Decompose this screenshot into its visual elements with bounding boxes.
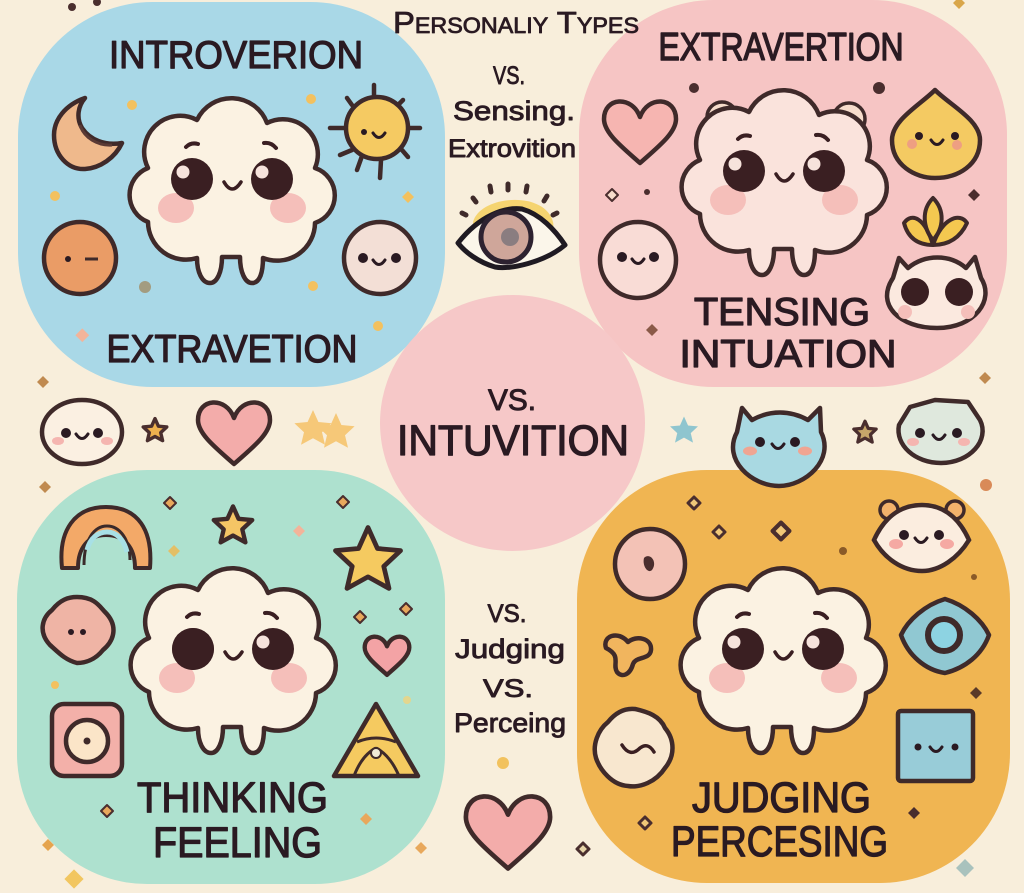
icon: cookie <box>595 709 672 786</box>
panel: extraversion <box>579 0 1007 387</box>
icon: large star <box>335 528 401 588</box>
cloud character <box>130 98 335 283</box>
icon: small star <box>143 419 167 441</box>
icon: left face <box>42 400 122 464</box>
icon: cat <box>887 257 985 328</box>
row icons between panels <box>42 400 983 486</box>
label: thinking feeling <box>137 774 328 867</box>
heading: introversion: INTROVERION <box>109 34 363 77</box>
icon: square face <box>898 711 973 781</box>
icon: right face <box>898 400 983 463</box>
sparkles <box>42 496 427 854</box>
icon: blue cat <box>733 408 825 486</box>
icon: orange ball <box>44 222 116 294</box>
icon: drop <box>892 90 980 178</box>
sparkles <box>639 497 982 829</box>
label: thinking feeling: THINKING <box>137 774 328 822</box>
top title text: Sensing. <box>453 96 575 126</box>
icon: central eye <box>458 184 565 268</box>
label: vs intuvition <box>397 384 629 465</box>
label: tensing intuation: INTUATION <box>680 333 896 376</box>
icon: blue sparkle <box>670 416 698 443</box>
heading: extravertion: EXTRAVERTION <box>658 26 904 69</box>
label: vs intuvition: INTUVITION <box>397 417 629 465</box>
lower centre text: VS. <box>483 675 533 703</box>
icon: pink disc <box>615 529 685 599</box>
icon: small star right <box>854 421 876 442</box>
top title text: Personaliy Types <box>393 5 639 40</box>
label: judging percesing: PERCESING <box>671 818 888 866</box>
icon: small heart <box>365 637 409 675</box>
top title text: Extrovition <box>448 135 576 163</box>
top title text: VS. <box>493 62 525 90</box>
icon: clover <box>605 635 651 675</box>
cloud character <box>131 568 336 753</box>
panel: introversion <box>18 2 445 387</box>
lower centre text: Perceing <box>454 708 566 738</box>
icon: face <box>600 222 676 298</box>
icon: rainbow <box>61 507 150 568</box>
icon: moon <box>54 98 122 169</box>
cloud ears <box>707 102 865 135</box>
icon: bear face <box>874 501 969 571</box>
sparkles <box>50 94 414 342</box>
panel: thinking feeling <box>17 470 445 884</box>
label: tensing intuation: TENSING <box>694 291 870 334</box>
label: thinking feeling: FEELING <box>153 819 322 867</box>
label: judging percesing <box>671 774 888 866</box>
icon: flower <box>904 198 967 245</box>
cloud character <box>681 568 886 753</box>
icon: triangle <box>334 704 418 776</box>
lower centre text: Judging <box>455 634 565 664</box>
label: extravetion: EXTRAVETION <box>106 328 358 371</box>
label: vs intuvition: VS. <box>488 384 536 417</box>
label: tensing intuation <box>680 291 896 376</box>
icon: sun <box>330 85 420 178</box>
lower centre text: VS. <box>488 600 526 628</box>
icon: heart <box>604 101 676 163</box>
icon: bottom heart <box>466 796 550 868</box>
sparkles <box>606 82 980 336</box>
icon: small star <box>214 506 252 542</box>
icon: pink heart <box>198 402 270 464</box>
center circle <box>380 295 645 551</box>
icon: eye <box>901 599 989 673</box>
icon: square speaker <box>52 704 122 776</box>
top title text <box>393 5 639 163</box>
icon: blob <box>43 597 113 663</box>
icon: orange sparkles <box>294 410 355 448</box>
cloud character <box>682 90 887 275</box>
label: judging percesing: JUDGING <box>692 774 871 822</box>
lower centre text <box>454 600 566 738</box>
panel: judging perceiving <box>577 470 1010 883</box>
icon: face <box>344 222 416 294</box>
